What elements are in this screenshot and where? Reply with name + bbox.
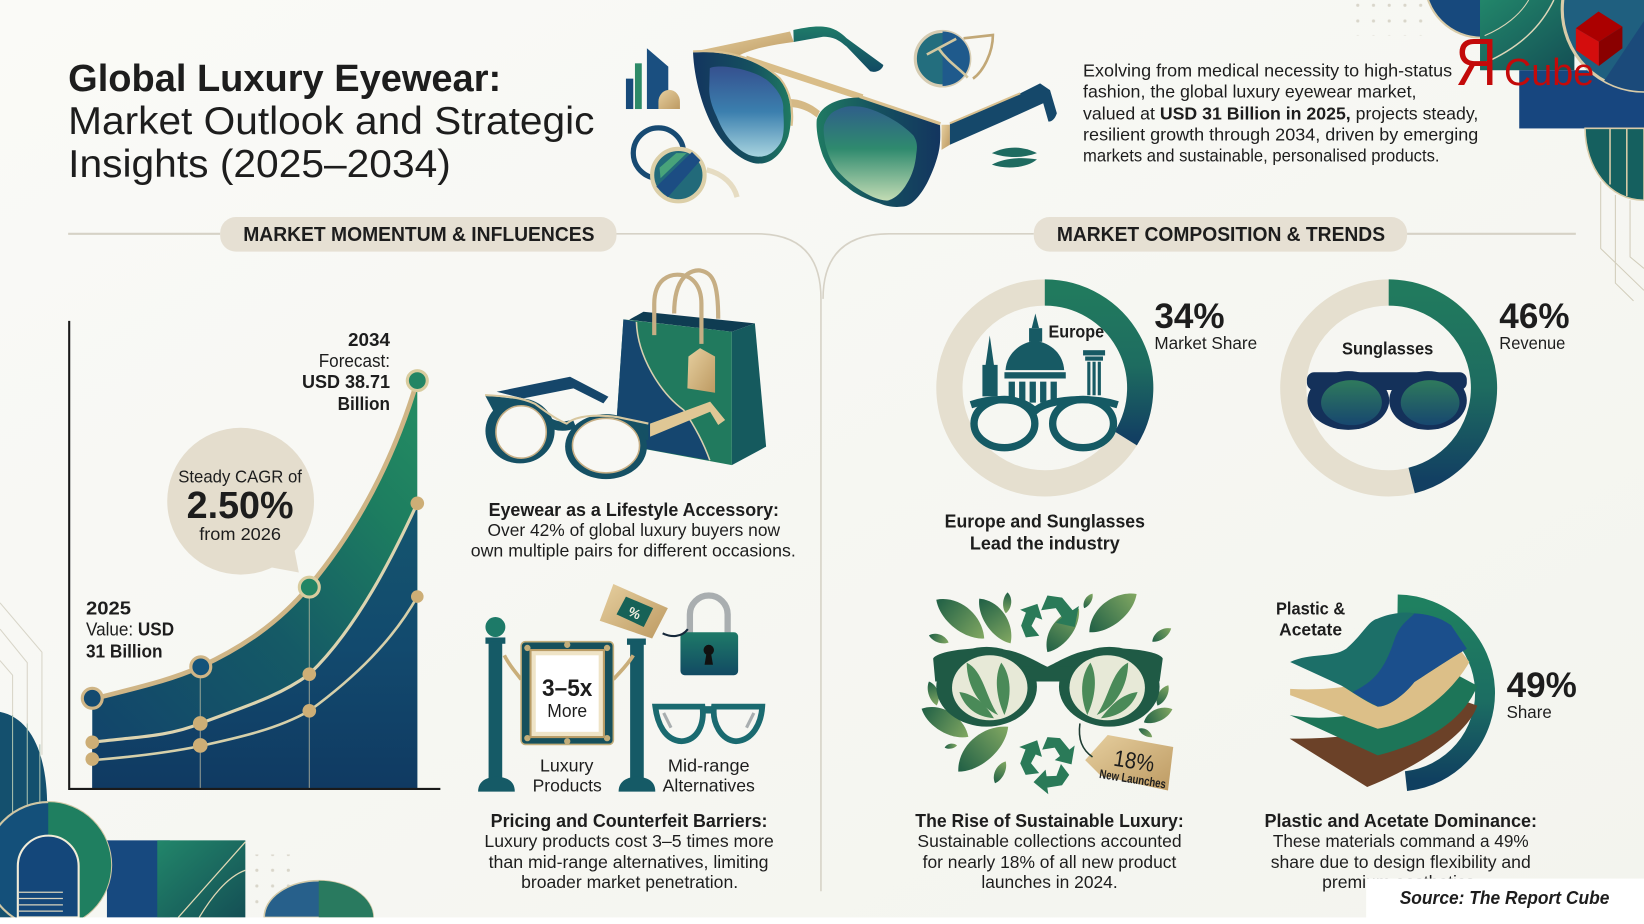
title: Global Luxury Eyewear: bbox=[68, 57, 501, 99]
mid-range glasses bbox=[655, 707, 762, 741]
title: Insights (2025–2034) bbox=[68, 143, 451, 186]
label: 2034 forecast: Billion bbox=[338, 393, 390, 414]
icon: material layers with share arc: Acetate bbox=[1279, 619, 1342, 639]
text: plastic and acetate: These materials command a 49% bbox=[1273, 831, 1529, 851]
text: sustainable luxury: The Rise of Sustainable Luxury: bbox=[915, 810, 1184, 831]
leaves bbox=[917, 584, 1175, 785]
donut: sunglasses revenue: Sunglasses bbox=[1342, 338, 1433, 358]
text: pricing barriers bbox=[484, 810, 774, 892]
labels: Products bbox=[533, 776, 602, 796]
labels: Alternatives bbox=[663, 776, 755, 796]
title bbox=[68, 57, 594, 186]
text: pricing barriers: Luxury products cost 3–5 times more bbox=[484, 831, 774, 851]
donut: europe share bbox=[949, 293, 1257, 483]
heading: market composition: MARKET COMPOSITION & TRENDS bbox=[1057, 224, 1385, 246]
labels bbox=[533, 756, 755, 796]
intro text: resilient growth through 2034, driven by emerging bbox=[1083, 124, 1478, 144]
ornate frame bbox=[521, 642, 613, 744]
icon: main sunglasses bbox=[693, 27, 1057, 207]
intro text bbox=[1083, 61, 1478, 165]
label: 2025 value bbox=[86, 597, 174, 661]
price tag bbox=[600, 584, 668, 639]
text: lifestyle accessory bbox=[471, 499, 796, 561]
text: plastic and acetate bbox=[1264, 810, 1537, 892]
text: sustainable luxury: for nearly 18% of all new product bbox=[923, 852, 1176, 872]
labels: Mid-range bbox=[668, 756, 750, 776]
source note bbox=[1366, 879, 1644, 924]
eco glasses bbox=[933, 647, 1163, 727]
recycling symbol top bbox=[1012, 596, 1079, 642]
donut: europe share: Market Share bbox=[1154, 333, 1257, 353]
label: 2034 forecast: 2034 bbox=[348, 329, 391, 350]
ornate frame: 3–5x bbox=[542, 675, 593, 702]
ornate frame: More bbox=[547, 700, 587, 721]
section dividers bbox=[68, 234, 1576, 891]
callout: CAGR: Steady CAGR of bbox=[178, 466, 302, 486]
heading: market composition bbox=[1034, 217, 1407, 252]
intro text: valued at USD 31 Billion in 2025, projects steady, bbox=[1083, 104, 1478, 124]
icon: material layers with share arc: 49% bbox=[1507, 665, 1577, 705]
text: plastic and acetate: premium aesthetics. bbox=[1322, 872, 1479, 892]
text: europe and sunglasses lead: Lead the industry bbox=[970, 532, 1120, 553]
label: 2025 value: 31 Billion bbox=[86, 640, 163, 661]
chart axes bbox=[69, 321, 440, 789]
labels: Luxury bbox=[540, 756, 594, 776]
label: 2025 value: Value: USD bbox=[86, 618, 174, 639]
chart: growth curve bbox=[69, 321, 440, 789]
donut: europe share: Europe bbox=[1048, 322, 1104, 342]
text: europe and sunglasses lead bbox=[945, 510, 1145, 553]
icon: european buildings bbox=[982, 313, 1105, 403]
intro text: fashion, the global luxury eyewear market, bbox=[1083, 82, 1416, 102]
text: lifestyle accessory: Eyewear as a Lifestyle Accessory: bbox=[489, 499, 779, 520]
text: plastic and acetate: Plastic and Acetate Dominance: bbox=[1264, 810, 1537, 831]
icon: small round lens right bbox=[915, 31, 993, 86]
label: 2025 value: 2025 bbox=[86, 597, 131, 618]
text: pricing barriers: broader market penetration. bbox=[521, 872, 738, 892]
text: lifestyle accessory: Over 42% of global luxury buyers now bbox=[488, 520, 780, 540]
icon: dark sunglasses bbox=[1307, 371, 1467, 430]
text: sustainable luxury: launches in 2024. bbox=[981, 872, 1118, 892]
intro text: Exolving from medical necessity to high-status bbox=[1083, 61, 1452, 81]
icon: material layers with share arc: Share bbox=[1507, 702, 1552, 722]
donut: europe share: 34% bbox=[1154, 296, 1225, 336]
text: europe and sunglasses lead: Europe and Sunglasses bbox=[945, 510, 1145, 531]
padlock bbox=[680, 596, 738, 675]
logo: RCube bbox=[1455, 12, 1622, 100]
label: 2034 forecast: Forecast: bbox=[319, 350, 390, 371]
tag: 18%: New Launches bbox=[1098, 767, 1167, 791]
icon: material layers with share arc: Plastic & bbox=[1276, 598, 1345, 618]
icon: round glasses bbox=[971, 399, 1118, 448]
text: lifestyle accessory: own multiple pairs for different occasions. bbox=[471, 541, 796, 561]
logo: RCube: Я bbox=[1455, 25, 1497, 100]
source note: Source: The Report Cube bbox=[1400, 887, 1609, 908]
icon: material layers with share arc bbox=[1276, 598, 1577, 787]
callout: CAGR: 2.50% bbox=[187, 484, 294, 526]
text: pricing barriers: than mid-range alternatives, limiting bbox=[489, 852, 769, 872]
hero sunglasses illustration bbox=[626, 27, 1057, 207]
recycling symbol bottom bbox=[1012, 737, 1075, 798]
chart area bbox=[82, 371, 427, 788]
rope posts bbox=[478, 617, 655, 792]
text: sustainable luxury bbox=[915, 810, 1184, 892]
label: 2034 forecast bbox=[302, 329, 391, 414]
text: sustainable luxury: Sustainable collections accounted bbox=[917, 831, 1182, 851]
icon: building bbox=[626, 48, 680, 109]
text: pricing barriers: Pricing and Counterfeit Barriers: bbox=[491, 810, 767, 831]
heading: market momentum bbox=[220, 217, 616, 252]
intro text: markets and sustainable, personalised products. bbox=[1083, 145, 1440, 165]
heading: market momentum: MARKET MOMENTUM & INFLUENCES bbox=[243, 224, 594, 246]
icon: shopping bag and glasses bbox=[485, 270, 766, 479]
title: Market Outlook and Strategic bbox=[68, 100, 594, 143]
text: plastic and acetate: share due to design flexibility and bbox=[1271, 852, 1531, 872]
donut: sunglasses revenue bbox=[1293, 293, 1570, 483]
icon: sustainable glasses with leaves bbox=[917, 584, 1175, 798]
label: 2034 forecast: USD 38.71 bbox=[302, 371, 390, 392]
tag: 18%: 18% bbox=[1112, 745, 1156, 777]
bottom white strip bbox=[0, 917, 1644, 924]
decoration: top right shapes bbox=[1346, 0, 1644, 301]
icon: velvet rope, frame, tag and lock bbox=[478, 584, 762, 796]
logo: RCube: Cube bbox=[1504, 51, 1594, 93]
callout: CAGR bbox=[167, 428, 314, 575]
tag: 18% bbox=[1079, 723, 1173, 791]
icon: small round lens left bbox=[633, 128, 737, 201]
price tag: % bbox=[626, 604, 643, 623]
donut: sunglasses revenue: 46% bbox=[1499, 296, 1570, 336]
donut: sunglasses revenue: Revenue bbox=[1499, 333, 1565, 353]
decoration: bottom left shapes bbox=[0, 603, 373, 924]
callout: CAGR: from 2026 bbox=[199, 524, 281, 544]
